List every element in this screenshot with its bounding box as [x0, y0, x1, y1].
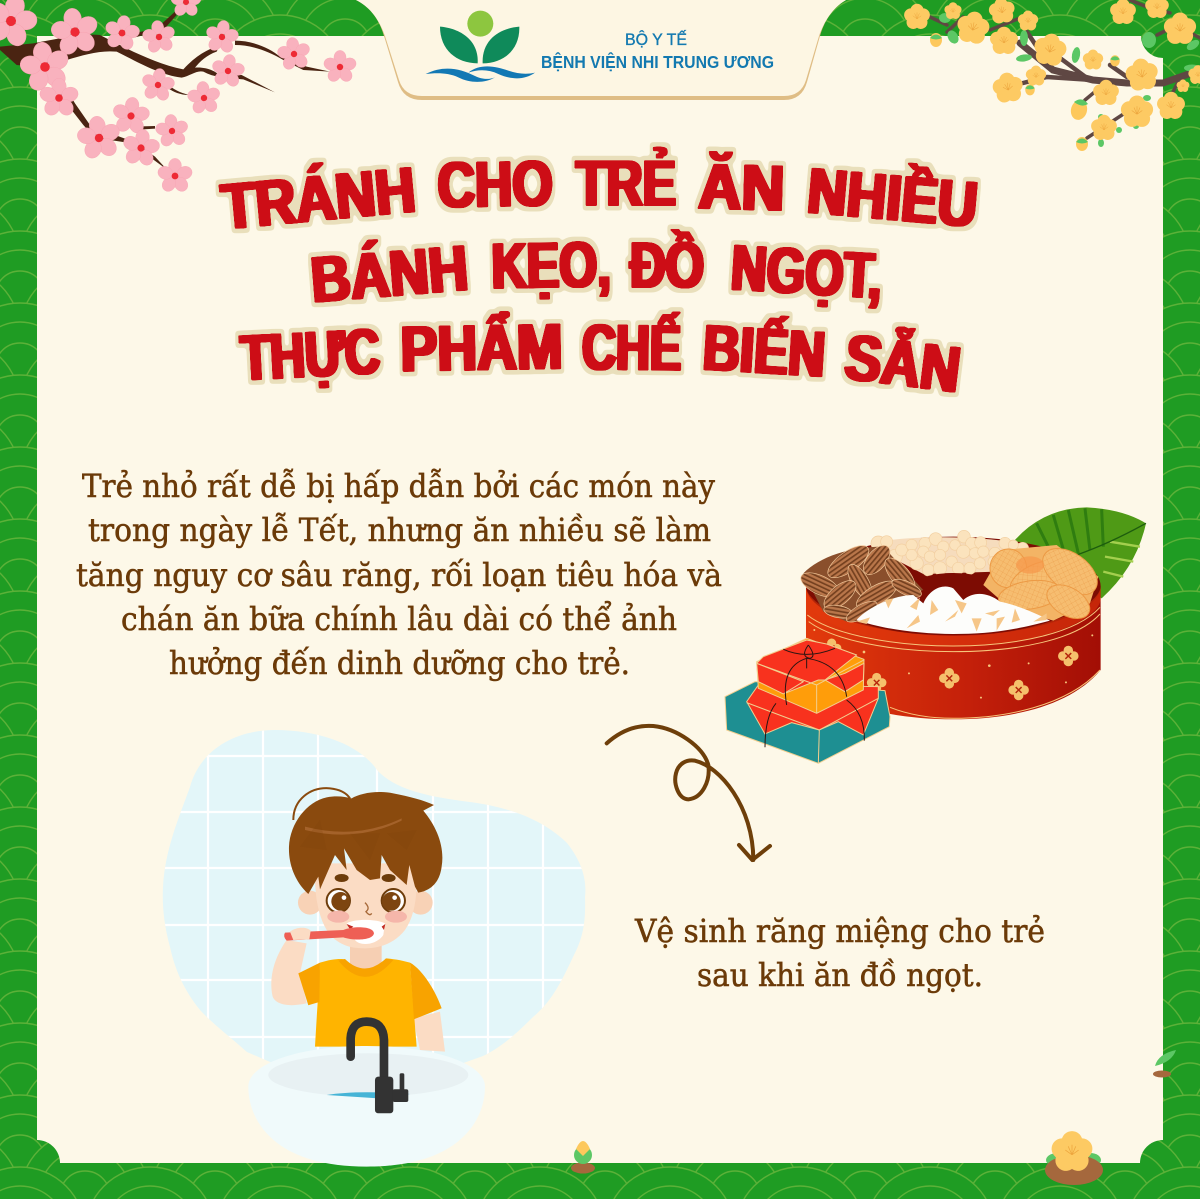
text: oral hygiene advice: sau khi ăn đồ ngọt.: [697, 956, 983, 994]
text: oral hygiene advice: [634, 912, 1045, 994]
sink: [248, 1046, 485, 1167]
title: [219, 146, 980, 406]
eyes: [327, 889, 405, 912]
title line 3: CHẾ: [582, 311, 682, 384]
gift box: orange: [757, 638, 864, 713]
text: oral hygiene advice: Vệ sinh răng miệng cho trẻ: [634, 912, 1045, 950]
title line 1: TRÁNH: [219, 153, 418, 243]
title line 3: [239, 310, 964, 406]
title line 1: CHO: [437, 147, 553, 221]
title line 3: SẴN: [841, 320, 964, 406]
illustration: Tet candy box and gifts: [725, 507, 1146, 763]
title line 2: BÁNH: [308, 231, 471, 316]
nose and cheeks: [365, 903, 372, 915]
candied coconut: [857, 586, 1050, 634]
peanuts: [983, 539, 1106, 625]
title line 2: NGỌT,: [729, 231, 884, 313]
eyebrows: [335, 874, 349, 882]
title line 1: ĂN: [698, 150, 786, 225]
paragraph: warning text: chán ăn bữa chính lâu dài có thể ảnh: [121, 600, 677, 638]
peach blossom branch, top left: [0, 0, 358, 194]
gift string: [765, 645, 864, 747]
arm and neck: [271, 940, 307, 1005]
decoration: leaf at right edge: [1153, 1050, 1176, 1078]
tin ornaments: [813, 629, 1093, 700]
illustration: boy brushing teeth: [248, 788, 485, 1167]
ears: [298, 891, 322, 915]
paragraph: warning text: trong ngày lễ Tết, nhưng ăn nhiều sẽ làm: [88, 511, 711, 549]
bathroom tile blob: [160, 720, 590, 1080]
header tab with logo: [356, 0, 846, 100]
toothbrush: [284, 927, 374, 941]
paragraph: warning text: [76, 467, 722, 682]
title line 3: BIẾN: [701, 311, 827, 391]
faucet: [351, 1022, 408, 1113]
almonds: [797, 540, 924, 626]
t-shirt: [315, 958, 417, 1047]
header tab with logo: BỆNH VIỆN NHI TRUNG ƯƠNG: [541, 51, 774, 72]
banana leaf: [1015, 507, 1146, 598]
title line 2: ĐỒ: [630, 228, 704, 302]
apricot blossom branch, top right: [902, 0, 1200, 151]
face: [315, 863, 416, 948]
title line 1: NHIỀU: [805, 154, 980, 241]
gift box: teal: [725, 682, 890, 763]
lotus seeds: [870, 530, 1029, 576]
hair: [289, 788, 442, 894]
title line 1: [219, 146, 980, 243]
hand: [290, 928, 311, 940]
tin body: [806, 586, 1101, 719]
mouth with foam: [347, 920, 385, 944]
logo mark: [426, 11, 535, 82]
arrow: [607, 726, 770, 860]
title line 3: PHẨM: [400, 310, 563, 385]
paragraph: warning text: hưởng đến dinh dưỡng cho trẻ.: [169, 644, 630, 682]
paragraph: warning text: Trẻ nhỏ rất dễ bị hấp dẫn bởi các món này: [82, 467, 715, 505]
title line 2: [308, 227, 884, 316]
decoration: sprout bottom centre: [571, 1141, 595, 1174]
title line 2: KẸO,: [491, 227, 611, 302]
title line 1: TRẺ: [576, 146, 676, 220]
title line 3: THỰC: [239, 314, 382, 394]
paragraph: warning text: tăng nguy cơ sâu răng, rối loạn tiêu hóa và: [76, 556, 722, 594]
logo text: BỘ Y TẾ: [625, 30, 687, 49]
center hole: [916, 573, 991, 597]
decoration: flower in bowl bottom right: [1045, 1131, 1103, 1185]
